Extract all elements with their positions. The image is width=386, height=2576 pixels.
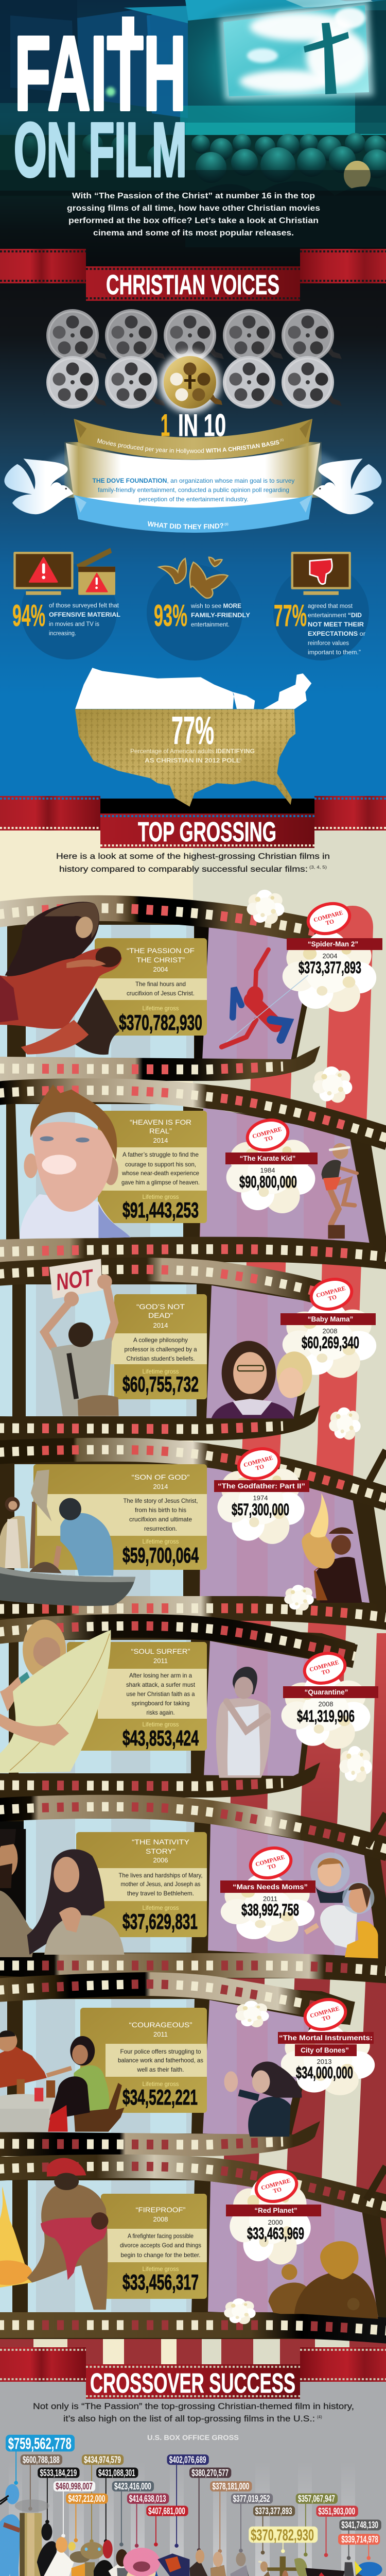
title: Faith on Film <box>14 14 187 193</box>
image: spider-man <box>222 950 308 1047</box>
card: Soul Surfer: After losing her arm in a <box>129 1672 192 1679</box>
panel: stat 94 percent <box>12 548 120 659</box>
icon: compare badge <box>244 1116 291 1154</box>
image: student holding NOT sign <box>44 1259 119 1416</box>
icon: right dove <box>312 459 382 514</box>
panel: film row 8 <box>0 2156 386 2339</box>
card: The Passion of the Christ: “THE PASSION OF <box>127 946 195 955</box>
compare: Mars Needs Moms: 2011 <box>263 1895 277 1903</box>
chart: price tag connector lines and dots <box>14 2451 371 2560</box>
image: Godfather figure with flame <box>302 1493 362 1603</box>
compare: Baby Mama: 2008 <box>323 1327 337 1335</box>
card: The Nativity Story <box>76 1832 207 1937</box>
compare: Baby Mama: “Baby Mama” <box>308 1315 353 1323</box>
icon: compare badge: COMPARE <box>309 2006 340 2020</box>
image: karate kid <box>321 1143 357 1239</box>
card: God's Not Dead: 2014 <box>153 1321 168 1329</box>
card: The Nativity Story: $37,629,831 <box>122 1909 198 1934</box>
card: Heaven is for Real: $91,443,253 <box>122 1198 199 1222</box>
image: pieta figures <box>0 902 122 1055</box>
heading: 1 in 10: IN 10 <box>178 408 226 443</box>
card: God's Not Dead: $60,755,732 <box>122 1372 199 1396</box>
chart: price pills: $378,181,000 <box>212 2481 249 2492</box>
icon: compare badge: TO <box>321 1668 331 1676</box>
banner: Crossover Success <box>0 2347 386 2399</box>
card: Son of God: resurrection. <box>144 1525 177 1532</box>
Dove Foundation text: THE DOVE FOUNDATION, an organization whose main goal is to survey <box>93 477 294 484</box>
intro text: With “The Passion of the Christ” at number 16 in the top <box>72 192 315 200</box>
panel: stat 93 percent: 93% <box>154 599 187 633</box>
card: Son of God: 2014 <box>153 1483 168 1490</box>
intro: crossover: (4) <box>317 2415 322 2419</box>
image: boy looking up <box>20 1084 131 1239</box>
card: Fireproof: A firefighter facing possible <box>128 2232 194 2240</box>
icon: compare badge <box>253 2167 300 2206</box>
compare: The Karate Kid: $90,800,000 <box>239 1173 297 1191</box>
card: Soul Surfer: $43,853,424 <box>122 1726 199 1750</box>
card: The Passion of the Christ: $370,782,930 <box>119 1010 202 1035</box>
intro: top grossing <box>56 852 330 874</box>
image: firefighter carrying child <box>0 2158 109 2310</box>
card: Son of God: The life story of Jesus Christ, <box>124 1497 198 1504</box>
intro: top grossing: (3, 4, 5) <box>309 865 327 870</box>
card: Soul Surfer: risks again. <box>146 1709 175 1716</box>
card: Heaven is for Real: 2014 <box>153 1137 168 1144</box>
chart: price pills: $600,788,188 <box>23 2454 60 2465</box>
panel: film row 4 <box>0 1437 386 1620</box>
card: Heaven is for Real: A father’s struggle to find the <box>122 1151 199 1158</box>
compare: The Godfather Part II: 1974 <box>253 1494 268 1502</box>
icon: warning monitor <box>13 552 74 595</box>
card: Fireproof: “FIREPROOF” <box>136 2206 186 2214</box>
compare: The Mortal Instruments: $34,000,000 <box>296 2063 353 2082</box>
card: Soul Surfer: “SOUL SURFER” <box>131 1647 190 1655</box>
compare: Baby Mama <box>212 1275 376 1440</box>
film screen with cross <box>223 5 369 96</box>
chart: price pills: $377,019,252 <box>233 2494 270 2504</box>
panel: stat 77 percent expectations: 77% <box>274 599 307 633</box>
panel: film row 5 <box>0 1618 378 1798</box>
card: The Nativity Story: they travel to Bethlehem. <box>127 1890 194 1897</box>
intro text: cinema and some of its most popular releases. <box>93 229 294 238</box>
icon: gold reel with cross <box>164 356 222 409</box>
card: Courageous: $34,522,221 <box>122 2085 198 2109</box>
card: Fireproof <box>101 2194 207 2299</box>
hero cinema photo <box>0 0 386 289</box>
card: The Nativity Story: “THE NATIVITY <box>132 1838 190 1846</box>
card: Heaven is for Real: gave him a glimpse of heaven. <box>121 1179 200 1186</box>
title: Faith on Film: ON FILM <box>14 107 187 193</box>
icon: compare badge <box>305 899 353 938</box>
compare: The Karate Kid <box>225 1066 357 1239</box>
card: Courageous: Lifetime gross <box>142 2080 179 2088</box>
icon: compare badge: COMPARE <box>315 1285 346 1299</box>
chart heading: U.S. BOX OFFICE GROSS <box>147 2434 239 2442</box>
icon: compare badge: COMPARE <box>309 1659 340 1673</box>
chart: price pills: $437,212,000 <box>68 2494 105 2504</box>
card: Fireproof: $33,456,317 <box>122 2270 199 2294</box>
card: Fireproof: Lifetime gross <box>142 2265 179 2273</box>
card: Soul Surfer: shark attack, a surfer must <box>126 1681 196 1688</box>
icon group: film reels, 1 in 10 <box>46 309 342 413</box>
card: The Nativity Story: 2006 <box>153 1856 168 1864</box>
chart: price pills: $373,377,893 <box>255 2506 292 2516</box>
card: God's Not Dead <box>109 1294 207 1399</box>
card: Fireproof: 2008 <box>153 2215 168 2223</box>
section 2 background <box>0 283 386 799</box>
chart: price pills: $414,638,013 <box>129 2494 166 2504</box>
chart: price pills: $407,681,000 <box>148 2506 185 2516</box>
Dove Foundation text: perception of the entertainment industry. <box>139 496 248 503</box>
card: Soul Surfer: Lifetime gross <box>142 1721 179 1728</box>
panel: stat 77 percent expectations: important to them.” <box>308 650 361 656</box>
compare: Mars Needs Moms: “Mars Needs Moms” <box>233 1883 308 1891</box>
icon: compare badge <box>301 1649 348 1687</box>
gold ribbon: Movies produced per year in Hollywood WITH A CHRISTIAN BASIS <box>97 438 279 454</box>
panel: stat 77 percent expectations: entertainment “DID <box>308 613 362 619</box>
card: God's Not Dead: A college philosophy <box>133 1336 188 1344</box>
panel: stat 93 percent <box>147 557 250 660</box>
icon: compare badge: TO <box>255 1464 265 1472</box>
chart: price pills: $533,184,219 <box>40 2468 77 2478</box>
icon: compare badge: COMPARE <box>313 910 344 924</box>
chart: price pills: $759,562,778 <box>8 2434 72 2453</box>
panel: stat 77 percent expectations <box>273 552 369 660</box>
image: woman in white top <box>216 1667 271 1778</box>
card: God's Not Dead: Lifetime gross <box>142 1368 179 1375</box>
panel: stat 77 percent expectations: NOT MEET THEIR <box>308 622 364 628</box>
icon: compare badge: COMPARE <box>252 1126 283 1140</box>
panel: film row 2 <box>0 1066 386 1262</box>
card: Son of God: from his birth to his <box>135 1506 186 1514</box>
card: The Nativity Story: The lives and hardships of Mary, <box>118 1872 203 1879</box>
banner: Top Grossing <box>0 796 386 848</box>
icon: thumbs down monitor <box>291 552 351 595</box>
compare: Spider-Man 2 <box>222 890 382 1047</box>
blue ribbon: WHAT DID THEY FIND? <box>148 521 223 529</box>
card: God's Not Dead: “GOD’S NOT <box>136 1302 185 1311</box>
map: USA 77 percent Christian: Percentage of American adults IDENTIFYING <box>130 749 255 755</box>
panel: stat 77 percent expectations: agreed that most <box>308 603 353 609</box>
card: Fireproof: begin to change for the better. <box>120 2251 201 2259</box>
card: Heaven is for Real: “HEAVEN IS FOR <box>130 1118 191 1126</box>
chart: film character silhouettes <box>0 2484 382 2576</box>
blue ribbon: (1) <box>224 522 229 526</box>
card: Courageous: 2011 <box>153 2030 168 2038</box>
card: Courageous: “COURAGEOUS” <box>129 2021 192 2029</box>
compare: Quarantine: $41,319,906 <box>297 1707 355 1725</box>
image: astronauts <box>269 2241 378 2319</box>
chart: price pills: $370,782,930 <box>251 2526 314 2544</box>
card: Courageous: Four police offers struggling to <box>120 2048 201 2055</box>
image: surfer with board <box>0 1620 111 1773</box>
chart: price pills: $423,416,000 <box>114 2481 151 2492</box>
card: The Passion of the Christ: 2004 <box>153 965 168 973</box>
compare: Mars Needs Moms <box>220 1844 378 1958</box>
compare: Spider-Man 2: 2004 <box>323 952 337 960</box>
blue ribbon <box>74 495 312 533</box>
map: USA 77 percent Christian: AS CHRISTIAN IN 2012 POLL <box>145 758 240 764</box>
card: Son of God: crucifixion and ultimate <box>129 1516 192 1523</box>
panel: stat 77 percent expectations: reinforce values <box>308 640 349 647</box>
intro text: grossing films of all time, how have other Christian movies <box>67 204 320 213</box>
icon: compare badge <box>247 1844 294 1882</box>
panel: stat 93 percent: entertainment. <box>191 622 230 628</box>
card: The Passion of the Christ <box>95 938 207 1036</box>
card: Heaven is for Real: courage to support his son, <box>125 1161 196 1168</box>
Dove Foundation text: family-friendly entertainment, conducted a public opinion poll regarding <box>98 486 289 494</box>
intro: top grossing: history compared to comparably successful secular films: <box>59 865 308 874</box>
audience <box>0 87 386 247</box>
panel: film row 7 <box>0 1976 375 2156</box>
map: USA 77 percent Christian: 77% <box>171 709 214 753</box>
compare: The Karate Kid: “The Karate Kid” <box>240 1155 295 1162</box>
panel: stat 94 percent: in movies and TV is <box>49 621 99 628</box>
compare: Mars Needs Moms: $38,992,758 <box>241 1901 299 1919</box>
card: The Passion of the Christ: THE CHRIST” <box>136 956 185 964</box>
heading: 1 in 10: 1 <box>161 408 170 443</box>
heading: 1 in 10 <box>161 408 226 443</box>
compare: Quarantine <box>216 1649 378 1782</box>
icon: compare badge: TO <box>273 2187 283 2195</box>
card: Fireproof: divorce accepts God and things <box>120 2242 201 2249</box>
card: The Nativity Story: Lifetime gross <box>142 1904 179 1911</box>
compare: Spider-Man 2: “Spider-Man 2” <box>308 940 358 948</box>
intro: crossover: Not only is “The Passion” the top-grossing Christian-themed film in history, <box>33 2402 354 2411</box>
card: Heaven is for Real <box>98 1111 207 1223</box>
compare: Red Planet: 2000 <box>268 2218 283 2226</box>
map: USA 77 percent Christian: (2) <box>238 758 241 761</box>
card: Son of God: “SON OF GOD” <box>132 1473 190 1481</box>
map: USA 77 percent Christian <box>75 668 311 807</box>
gold ribbon: (1) <box>280 438 284 442</box>
section background: crossover <box>0 2381 386 2576</box>
panel: stat 94 percent: of those surveyed felt that <box>49 603 119 609</box>
card: Son of God: $59,700,064 <box>122 1543 199 1567</box>
card: Courageous <box>80 2008 207 2113</box>
icon: left dove <box>4 459 74 514</box>
intro text: performed at the box office? Let’s take a look at Christian <box>68 216 319 225</box>
icon: compare badge <box>302 1995 349 2033</box>
card: The Nativity Story: mother of Jesus, and Joseph as <box>120 1880 201 1888</box>
image: Jesus and fisherman in boat <box>0 1470 135 1606</box>
card: The Passion of the Christ: The final hours and <box>135 980 186 988</box>
gold ribbon <box>74 419 312 460</box>
intro: top grossing: Here is a look at some of the highest-grossing Christian films in <box>56 852 330 861</box>
card: Heaven is for Real: REAL” <box>149 1127 172 1135</box>
compare: Red Planet <box>224 2167 378 2324</box>
Dove Foundation text <box>93 477 294 503</box>
icon: compare badge: COMPARE <box>260 2178 291 2192</box>
card: The Nativity Story: STORY” <box>146 1847 176 1855</box>
card: Heaven is for Real: Lifetime gross <box>142 1193 179 1200</box>
panel: film row 3 <box>0 1259 376 1440</box>
chart: light columns and diagonal name stripes <box>0 2462 355 2576</box>
image: Lily Collins figure <box>224 2062 302 2137</box>
panel: stat 94 percent: 94% <box>12 599 45 633</box>
icon: compare badge: COMPARE <box>255 1854 286 1868</box>
compare: The Mortal Instruments: 2013 <box>317 2058 331 2065</box>
card: Heaven is for Real: whose near-death experience <box>121 1170 199 1177</box>
intro: crossover: it’s also high on the list of all top-grossing films in the U.S.: <box>63 2414 315 2424</box>
image: family at table <box>0 2030 125 2132</box>
intro text <box>67 192 320 238</box>
intro: crossover <box>33 2402 354 2424</box>
compare: The Godfather Part II: “The Godfather: Part II” <box>218 1482 305 1490</box>
icon: butterflies <box>159 557 228 598</box>
card: Son of God <box>33 1464 207 1570</box>
compare: The Mortal Instruments <box>224 1995 375 2137</box>
card: God's Not Dead: Christian student’s beliefs. <box>127 1355 195 1362</box>
panel: stat 94 percent: OFFENSIVE MATERIAL <box>49 612 120 618</box>
compare: Red Planet: $33,463,969 <box>247 2224 304 2243</box>
card: Soul Surfer: use her Christian faith as a <box>127 1690 195 1698</box>
compare: The Karate Kid: 1984 <box>260 1166 275 1174</box>
icon: compare badge: TO <box>267 1863 277 1871</box>
compare: The Mortal Instruments: “The Mortal Instruments: <box>279 2034 373 2042</box>
card: Son of God: Lifetime gross <box>142 1538 179 1545</box>
card: Soul Surfer: 2011 <box>153 1657 168 1665</box>
panel: stat 93 percent: FAMILY-FRIENDLY <box>191 613 250 619</box>
compare: The Godfather Part II: $57,300,000 <box>232 1500 289 1519</box>
panel: stat 77 percent expectations: EXPECTATIONS or <box>308 631 365 637</box>
card: Soul Surfer <box>67 1642 207 1751</box>
chart: price pills: $460,998,007 <box>56 2481 93 2492</box>
white dove panel <box>46 442 340 509</box>
title: Faith on Film: FAITH <box>14 14 186 132</box>
chart: price pills: $434,974,579 <box>84 2454 121 2465</box>
card: The Passion of the Christ: crucifixion of Jesus Christ. <box>127 990 195 997</box>
icon: compare badge: COMPARE <box>243 1455 274 1469</box>
banner: Christian Voices <box>0 249 386 301</box>
image: astronaut kids <box>305 1852 378 1958</box>
icon: warning clapperboard <box>76 548 115 595</box>
panel: stat 93 percent: wish to see MORE <box>190 603 241 609</box>
image: student holding NOT sign: NOT <box>54 1264 96 1295</box>
chart: price pills: $402,076,689 <box>169 2454 206 2465</box>
page background: top grossing stripes <box>0 824 386 2375</box>
panel: stat 94 percent: increasing. <box>49 631 76 637</box>
compare: The Godfather Part II <box>214 1445 362 1611</box>
panel: film row 6 <box>0 1795 386 1978</box>
compare: Quarantine: 2008 <box>319 1700 333 1708</box>
card: God's Not Dead: DEAD” <box>148 1311 173 1319</box>
card: God's Not Dead: professor is challenged by a <box>125 1346 197 1353</box>
image: Baby Mama stars <box>212 1341 312 1418</box>
chart: price pills <box>6 2434 381 2545</box>
icon: compare badge: TO <box>322 2014 331 2023</box>
icon: compare badge <box>308 1275 355 1313</box>
chart: price pills: $351,903,000 <box>318 2506 355 2516</box>
icon: compare badge: TO <box>325 919 335 927</box>
chart: price pills: $357,067,947 <box>298 2494 335 2504</box>
icon: compare badge <box>235 1445 283 1483</box>
chart: price pills: $380,270,577 <box>191 2468 229 2478</box>
icon: compare badge: TO <box>328 1294 338 1302</box>
card: The Passion of the Christ: Lifetime gross <box>142 1005 179 1012</box>
compare: Red Planet: “Red Planet” <box>254 2207 297 2214</box>
card: Courageous: well as their faith. <box>137 2066 184 2073</box>
banner: Christian Voices: CHRISTIAN VOICES <box>106 269 279 300</box>
compare: Quarantine: “Quarantine” <box>305 1688 348 1696</box>
card: Courageous: balance work and fatherhood, as <box>118 2057 203 2064</box>
chart: price pills: $431,088,301 <box>98 2468 135 2478</box>
banner: Top Grossing: TOP GROSSING <box>138 817 276 848</box>
card: Soul Surfer: springboard for taking <box>132 1700 189 1707</box>
compare: The Mortal Instruments: City of Bones” <box>301 2046 349 2054</box>
image: Mary and Joseph <box>0 1829 125 1957</box>
icon: compare badge: TO <box>264 1135 274 1143</box>
panel: film row 1 <box>0 890 382 1081</box>
